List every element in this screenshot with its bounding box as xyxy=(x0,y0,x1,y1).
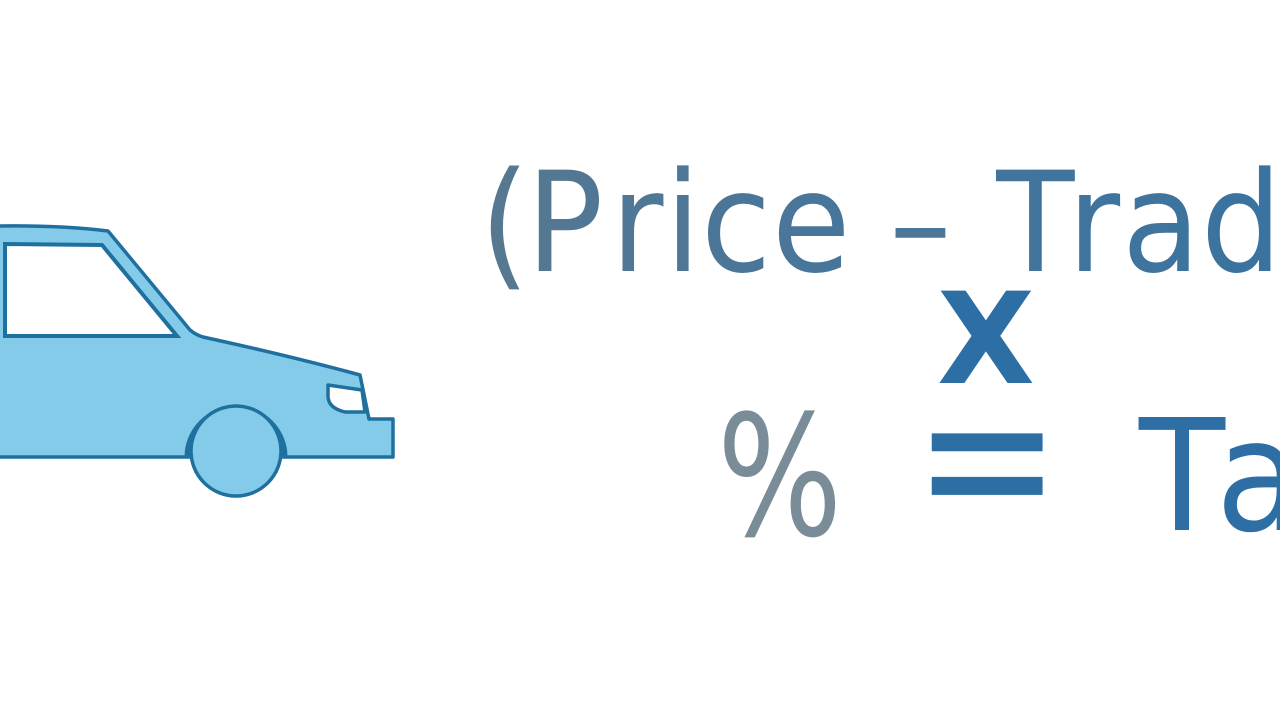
multiply sign: X xyxy=(937,265,1035,413)
formula: price minus trade: (Price xyxy=(480,143,851,304)
icon: car xyxy=(0,226,393,496)
car headlight xyxy=(328,385,365,412)
wheel arch xyxy=(187,408,285,457)
equals sign: = xyxy=(913,330,1061,584)
percent sign: % xyxy=(717,379,842,575)
car body xyxy=(0,226,393,457)
minus dash: – xyxy=(890,143,951,305)
car wheel xyxy=(191,406,281,496)
car window xyxy=(5,244,177,336)
